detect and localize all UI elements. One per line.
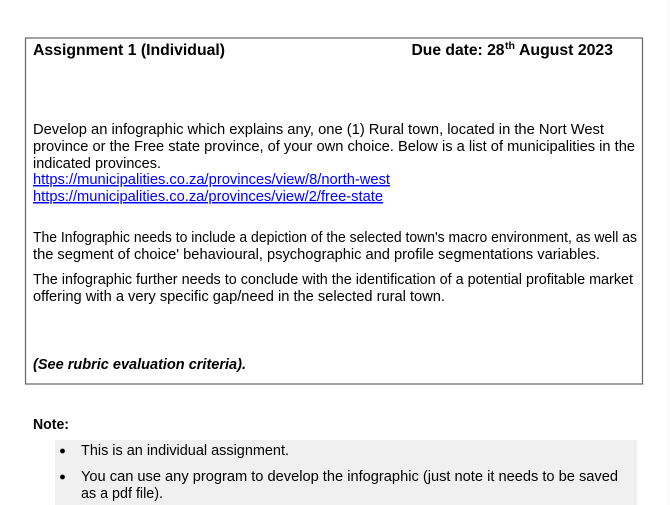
heading: due date (412, 41, 613, 59)
text block: task description (33, 122, 635, 172)
text block: municipality links (33, 172, 390, 205)
text block: rubric reference: (See rubric evaluation criteria). (33, 357, 246, 373)
bullet: individual assignment: This is an individual assignment. (81, 443, 289, 459)
text block: conclusion requirement: offering with a very specific gap/need in the selected rural town. (33, 289, 445, 305)
bullet: program and pdf format: You can use any program to develop the infographic (just note it needs to be saved (81, 469, 618, 485)
bullet: program and pdf format: as a pdf file). (81, 486, 163, 502)
panel: note bullets (55, 440, 637, 505)
text block: task description: province or the Free state province, of your own choice. Below is a list of municipalities in the (33, 139, 635, 155)
heading: note: Note: (33, 416, 69, 433)
text block: municipality links: https://municipalities.co.za/provinces/view/8/north-west (33, 172, 390, 188)
text block: conclusion requirement: The infographic further needs to conclude with the identification of a potential profitable market (33, 272, 633, 288)
heading: assignment title: Assignment 1 (Individual) (33, 42, 225, 59)
panel: assignment brief box (26, 38, 642, 384)
text block: infographic requirements: the segment of choice' behavioural, psychographic and profile segmentations variables. (33, 247, 600, 263)
text block: infographic requirements (33, 230, 637, 263)
heading: due date: August 2023 (519, 42, 613, 59)
heading: due date: th (505, 41, 515, 52)
text block: infographic requirements: The Infographic needs to include a depiction of the selected town's macro environment, as well as (33, 230, 637, 246)
text block: task description: Develop an infographic which explains any, one (1) Rural town, located in the Nort West (33, 122, 604, 138)
bullet: program and pdf format (60, 469, 618, 502)
text block: task description: indicated provinces. (33, 156, 161, 172)
text block: municipality links: https://municipalities.co.za/provinces/view/2/free-state (33, 189, 383, 205)
text block: conclusion requirement (33, 272, 633, 305)
heading: due date: Due date: 28 (412, 42, 505, 59)
